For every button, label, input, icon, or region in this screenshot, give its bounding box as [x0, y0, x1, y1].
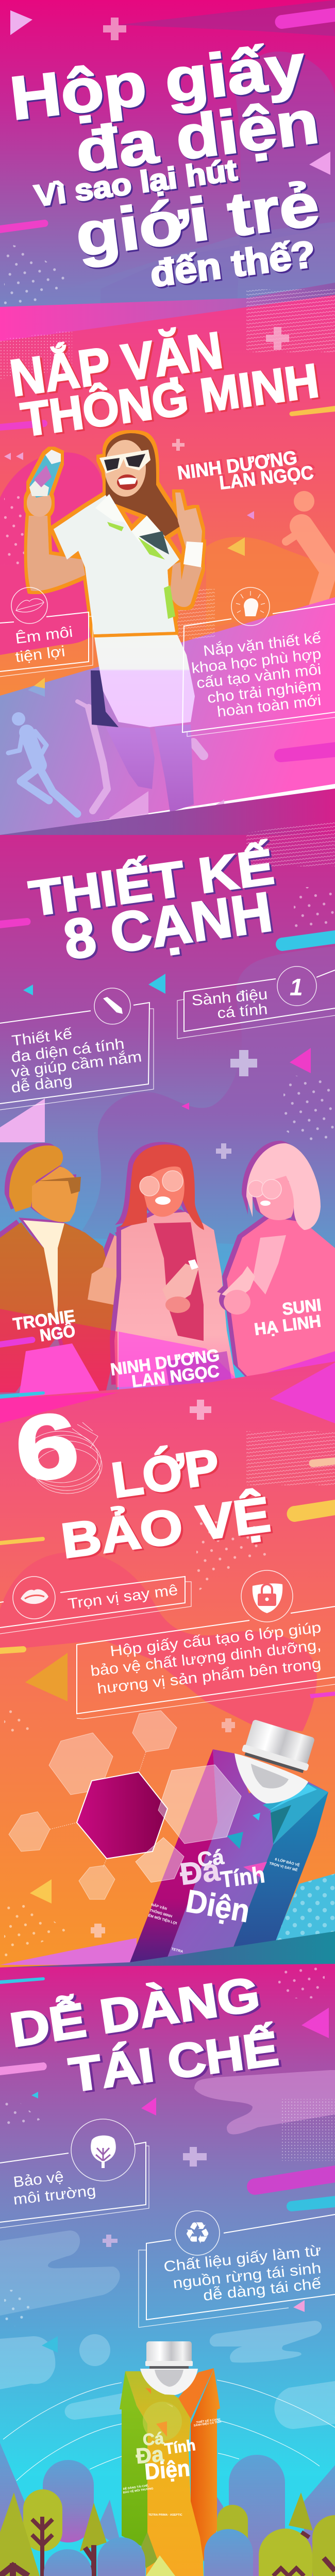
left runner silhouette	[8, 712, 77, 814]
face	[105, 440, 146, 497]
glass hexagons over carton	[136, 1765, 241, 1882]
portrait names: LAN NGỌC	[130, 1361, 221, 1391]
carton small text: THÔNG MINH	[149, 1908, 173, 1918]
hexagons behind carton	[9, 1711, 177, 1899]
callout: full flavor: Trọn vị say mê	[67, 1582, 179, 1613]
plus decoration	[103, 2235, 118, 2247]
wristband	[183, 542, 203, 567]
portrait names: HẠ LINH	[253, 1311, 322, 1339]
portrait names	[12, 1295, 322, 1391]
callout: stylish	[177, 966, 335, 1039]
green triangles	[0, 2492, 40, 2576]
callout: multi-faceted design	[0, 988, 154, 1110]
carton small text	[147, 1857, 300, 1954]
callout: cap design: Nắp vặn thiết kế	[203, 629, 322, 660]
carton small text: TETRA PRIMA · ASEPTIC	[148, 2514, 182, 2517]
dots left	[4, 2099, 40, 2132]
callout: six layers	[77, 1570, 335, 1719]
woman: Ninh Dương Lan Ngọc	[114, 1144, 236, 1387]
portrait names: NINH DƯƠNG	[109, 1345, 221, 1379]
icon: number one: 1	[290, 974, 303, 1000]
pink pill	[0, 420, 47, 431]
section 4 colour corner with dots	[0, 1874, 335, 1965]
turtleneck	[23, 1220, 64, 1325]
icon: recycle	[175, 2211, 220, 2255]
left dots	[4, 492, 52, 567]
callout: full flavor	[0, 1577, 191, 1634]
shirt collar and stripes	[95, 494, 165, 542]
carton small text: TETRA	[171, 1947, 183, 1954]
left panel	[130, 1749, 217, 1962]
man: Tronie Ngô	[0, 1145, 132, 1392]
signal arcs	[3, 2380, 335, 2481]
callout: protect environment	[0, 2119, 149, 2228]
hero title: Vì sao lại hút	[32, 153, 239, 213]
yellow thin pill	[0, 1537, 45, 1545]
pink pill	[274, 742, 335, 762]
forest back layer	[0, 2443, 335, 2576]
callout: soft on lips: Êm môi	[14, 624, 74, 647]
smile	[117, 474, 138, 490]
section 4 heading: LỚP	[108, 1439, 223, 1508]
carton brand text: Diện	[183, 1883, 253, 1929]
pink pill	[0, 1337, 35, 1348]
plus decoration	[172, 439, 185, 451]
lace top	[253, 1235, 286, 1294]
hero title: đa diện	[72, 88, 323, 185]
dots field	[281, 2099, 335, 2161]
dots	[4, 1707, 41, 1738]
icon: lightbulb	[231, 587, 270, 626]
carton: green and orange	[120, 2341, 222, 2576]
cyan thin pill	[0, 1977, 45, 1984]
hair	[106, 433, 180, 536]
carton brand text: Đa	[178, 1852, 222, 1892]
front panel	[125, 2368, 214, 2576]
carton small text: THIẾT KẾ 8 CẠNH	[196, 2417, 221, 2424]
callout: recycled material: Chất liệu giấy làm từ	[163, 2242, 322, 2275]
icon: recycle: ♻	[184, 2216, 211, 2251]
section 3 heading: THIẾT KẾ	[26, 839, 277, 927]
triangles	[0, 974, 311, 1142]
dots left lower	[4, 2290, 40, 2328]
callout: protect environment: môi trường	[12, 2183, 97, 2208]
section 5 heading: TÁI CHẾ	[66, 2021, 281, 2102]
wave texture	[246, 289, 335, 352]
icon: pencil	[94, 988, 130, 1024]
triangle decoration	[10, 10, 32, 35]
cyan pill	[276, 930, 335, 951]
dark hexagon	[77, 1772, 167, 1859]
hand	[165, 1297, 190, 1313]
trunks	[0, 2517, 335, 2576]
sky shapes	[0, 2321, 335, 2429]
yellow thin pill	[290, 406, 335, 416]
collar	[140, 2369, 198, 2395]
carton brand text: Cá	[142, 2429, 165, 2449]
callout: protect environment: Bảo vệ	[12, 2169, 64, 2191]
icon: number one	[277, 966, 316, 1006]
orange facet	[178, 2368, 214, 2419]
hero title	[7, 32, 323, 295]
carton brand text: Diện	[144, 2455, 191, 2485]
portrait names: TRONIE	[12, 1306, 76, 1334]
carton brand text: Cá	[196, 1846, 226, 1872]
callout: cap design: cho trải nghiệm	[207, 677, 322, 707]
plus decoration	[222, 1718, 235, 1732]
magenta pill	[247, 2165, 335, 2195]
triangle magenta	[270, 1363, 335, 1423]
callout: multi-faceted design: Thiết kế	[11, 1026, 73, 1049]
carton brand text	[135, 2429, 196, 2485]
collar	[234, 1753, 308, 1803]
center runner silhouette	[77, 701, 204, 811]
section 5 background	[0, 1931, 335, 2576]
section 1 background	[0, 0, 335, 341]
decorative triangles	[4, 452, 254, 836]
icon: shield lock	[241, 1570, 293, 1622]
wave texture	[246, 1431, 335, 1485]
carton brand text: Đa	[135, 2441, 165, 2468]
face	[253, 1176, 294, 1220]
section 2 heading: THÔNG MINH	[18, 354, 322, 447]
plus decoration	[266, 327, 289, 350]
pale cloud left	[0, 2230, 120, 2316]
carton small text: NẮP VẶN	[150, 1902, 167, 1911]
number six echo lines	[24, 1422, 102, 1494]
coat	[114, 1212, 236, 1387]
fine dots	[0, 330, 72, 379]
waves beside figure	[167, 589, 215, 638]
dots	[196, 1519, 267, 1593]
inner top	[154, 1222, 204, 1341]
cap	[241, 1718, 317, 1774]
hero title: giới trẻ	[72, 170, 323, 270]
orange right panel	[191, 2369, 220, 2562]
carton	[162, 1264, 198, 1305]
callout: multi-faceted design: dễ dàng	[10, 1072, 73, 1096]
pink pill	[0, 918, 31, 928]
section 4 background	[0, 1361, 335, 1975]
upper body with orange halo	[27, 433, 203, 634]
sunglasses	[37, 1177, 81, 1194]
carton brand text	[178, 1846, 266, 1929]
front panel	[167, 1749, 328, 1957]
hand	[224, 1290, 250, 1315]
section 4 heading: BẢO VỆ	[58, 1487, 273, 1569]
yellow triangle	[30, 1879, 52, 1904]
cream pill	[309, 1457, 335, 1467]
name label: NINH DƯƠNG	[176, 447, 298, 484]
carton small text: ÊM MÔI TIỆN LỢI	[147, 1913, 177, 1926]
right triangle decoration	[309, 152, 330, 175]
callout: multi-faceted design: đa diện cá tính	[10, 1036, 125, 1066]
woman figure: Ninh Dương Lan Ngọc	[27, 433, 203, 812]
hair	[246, 1143, 321, 1230]
callout: stylish: cá tính	[216, 1001, 269, 1022]
callout: cap design: cấu tạo vành môi	[196, 661, 322, 692]
forest front layer	[0, 2489, 335, 2576]
yellow pill	[287, 1500, 335, 1522]
callout: six layers: bảo vệ chất lượng dinh dưỡng,	[90, 1637, 322, 1680]
right hand	[175, 493, 202, 547]
hero title: Hộp giấy	[7, 32, 308, 133]
icon: mouth	[13, 1577, 55, 1619]
carton: purple and blue	[130, 1718, 328, 1962]
magenta thin pill	[310, 1692, 335, 1698]
carton small text	[123, 2417, 222, 2517]
carton triangles	[227, 1832, 243, 1849]
carton small text: BẢO VỆ MÔI TRƯỜNG	[123, 2486, 154, 2495]
blue rounded trees	[44, 2549, 92, 2576]
section 2 heading: NẮP VẶN	[7, 321, 226, 407]
bottom facets	[141, 2532, 158, 2568]
portrait names: NGÔ	[39, 1321, 76, 1345]
section 3 heading: 8 CẠNH	[60, 880, 276, 971]
cap	[146, 2341, 192, 2366]
yellow pill	[0, 1646, 26, 1654]
face	[32, 1167, 79, 1222]
hand	[88, 1267, 124, 1305]
hair	[9, 1145, 63, 1212]
callout: recycled material: dễ dàng tái chế	[203, 2275, 322, 2304]
jacket	[0, 1222, 118, 1392]
dots lower left	[4, 1898, 67, 1960]
shirt	[54, 495, 179, 634]
shorts	[91, 670, 119, 727]
top right pill	[275, 8, 335, 29]
carton small text: DỄ DÀNG TÁI CHẾ,	[123, 2484, 149, 2491]
carton small text: 6 LỚP BẢO VỆ	[275, 1857, 300, 1867]
callout: recycled material: nguồn rừng tái sinh	[172, 2260, 322, 2292]
green left panel	[120, 2371, 147, 2546]
right runner silhouette	[286, 491, 330, 609]
section 4 heading: 6	[9, 1392, 85, 1502]
smile	[260, 1201, 271, 1206]
carton small text: TRỌN VỊ SAY MÊ	[269, 1861, 298, 1873]
plus decoration	[183, 2147, 207, 2167]
coat	[227, 1217, 335, 1382]
section 2 background	[0, 283, 335, 701]
cyan facets	[263, 1783, 328, 1845]
right arm	[170, 562, 202, 607]
callout: recycled material	[139, 2211, 335, 2327]
callout: six layers: hương vị sản phẩm bên trong	[96, 1655, 322, 1697]
woman: Suni Hạ Linh	[222, 1143, 335, 1382]
plus decoration	[103, 18, 126, 40]
dot pattern	[4, 242, 74, 320]
pink pill	[0, 2062, 47, 2075]
left arm	[27, 516, 85, 591]
section 3 heading	[26, 839, 277, 971]
lower colour overlay of portraits	[0, 1309, 335, 1403]
carton held	[29, 450, 61, 498]
plus decoration small	[216, 1143, 231, 1159]
carton brand text: Tính	[219, 1862, 266, 1893]
smile	[155, 1196, 171, 1205]
skirt	[94, 630, 195, 727]
hero title: đến thế?	[148, 234, 318, 295]
callout: stylish: Sành điệu	[191, 986, 269, 1009]
green rounded trees	[23, 2489, 62, 2551]
section 5 heading	[7, 1967, 281, 2102]
callout: soft on lips: tiện lợi	[14, 643, 66, 666]
callout: multi-faceted design: và giúp cầm nắm	[10, 1048, 143, 1081]
carton	[222, 1266, 255, 1300]
panel: smart cap lower colour block	[0, 597, 335, 836]
callout: six layers: Hộp giấy cấu tạo 6 lớp giúp	[109, 1619, 322, 1660]
cyan pill	[287, 2196, 335, 2211]
light circle	[143, 2402, 182, 2441]
plus decoration	[230, 1050, 257, 1076]
callout: cap design	[182, 587, 335, 736]
left hand	[27, 489, 52, 517]
carton brand text: Tính	[163, 2437, 196, 2458]
plus decoration	[91, 1924, 105, 1938]
icon: lips	[11, 587, 47, 624]
name label: LAN NGỌC	[218, 462, 315, 494]
dots right	[283, 1073, 335, 1145]
section 5 heading: DỄ DÀNG	[7, 1967, 263, 2057]
carton in hand	[98, 1235, 127, 1284]
section 4 heading	[9, 1392, 273, 1569]
plus decoration	[190, 1400, 211, 1420]
icon: tree leaf	[71, 2119, 135, 2181]
triangles	[31, 2008, 329, 2312]
sunglasses	[99, 450, 150, 473]
callout: cap design: hoàn toàn mới	[216, 692, 322, 720]
carton small text: SÀNH ĐIỆU CÁ TÍNH	[193, 2420, 222, 2427]
callout: cap design: khoa học phù hợp	[191, 646, 322, 677]
callout: soft on lips	[0, 587, 93, 677]
sky triangle	[42, 2336, 58, 2353]
portrait names: SUNI	[281, 1295, 322, 1319]
sunglasses	[248, 1179, 281, 1199]
dots top right	[278, 1967, 325, 1998]
section 3 background	[0, 789, 335, 1413]
dots	[294, 887, 335, 928]
left pill	[0, 220, 48, 233]
triangle	[25, 1653, 68, 1701]
sunglasses	[140, 1171, 183, 1196]
cyan thin pill	[0, 1391, 45, 1399]
face	[142, 1167, 185, 1217]
hair	[120, 1144, 204, 1230]
legs	[106, 725, 194, 812]
right panel	[233, 1792, 328, 1947]
